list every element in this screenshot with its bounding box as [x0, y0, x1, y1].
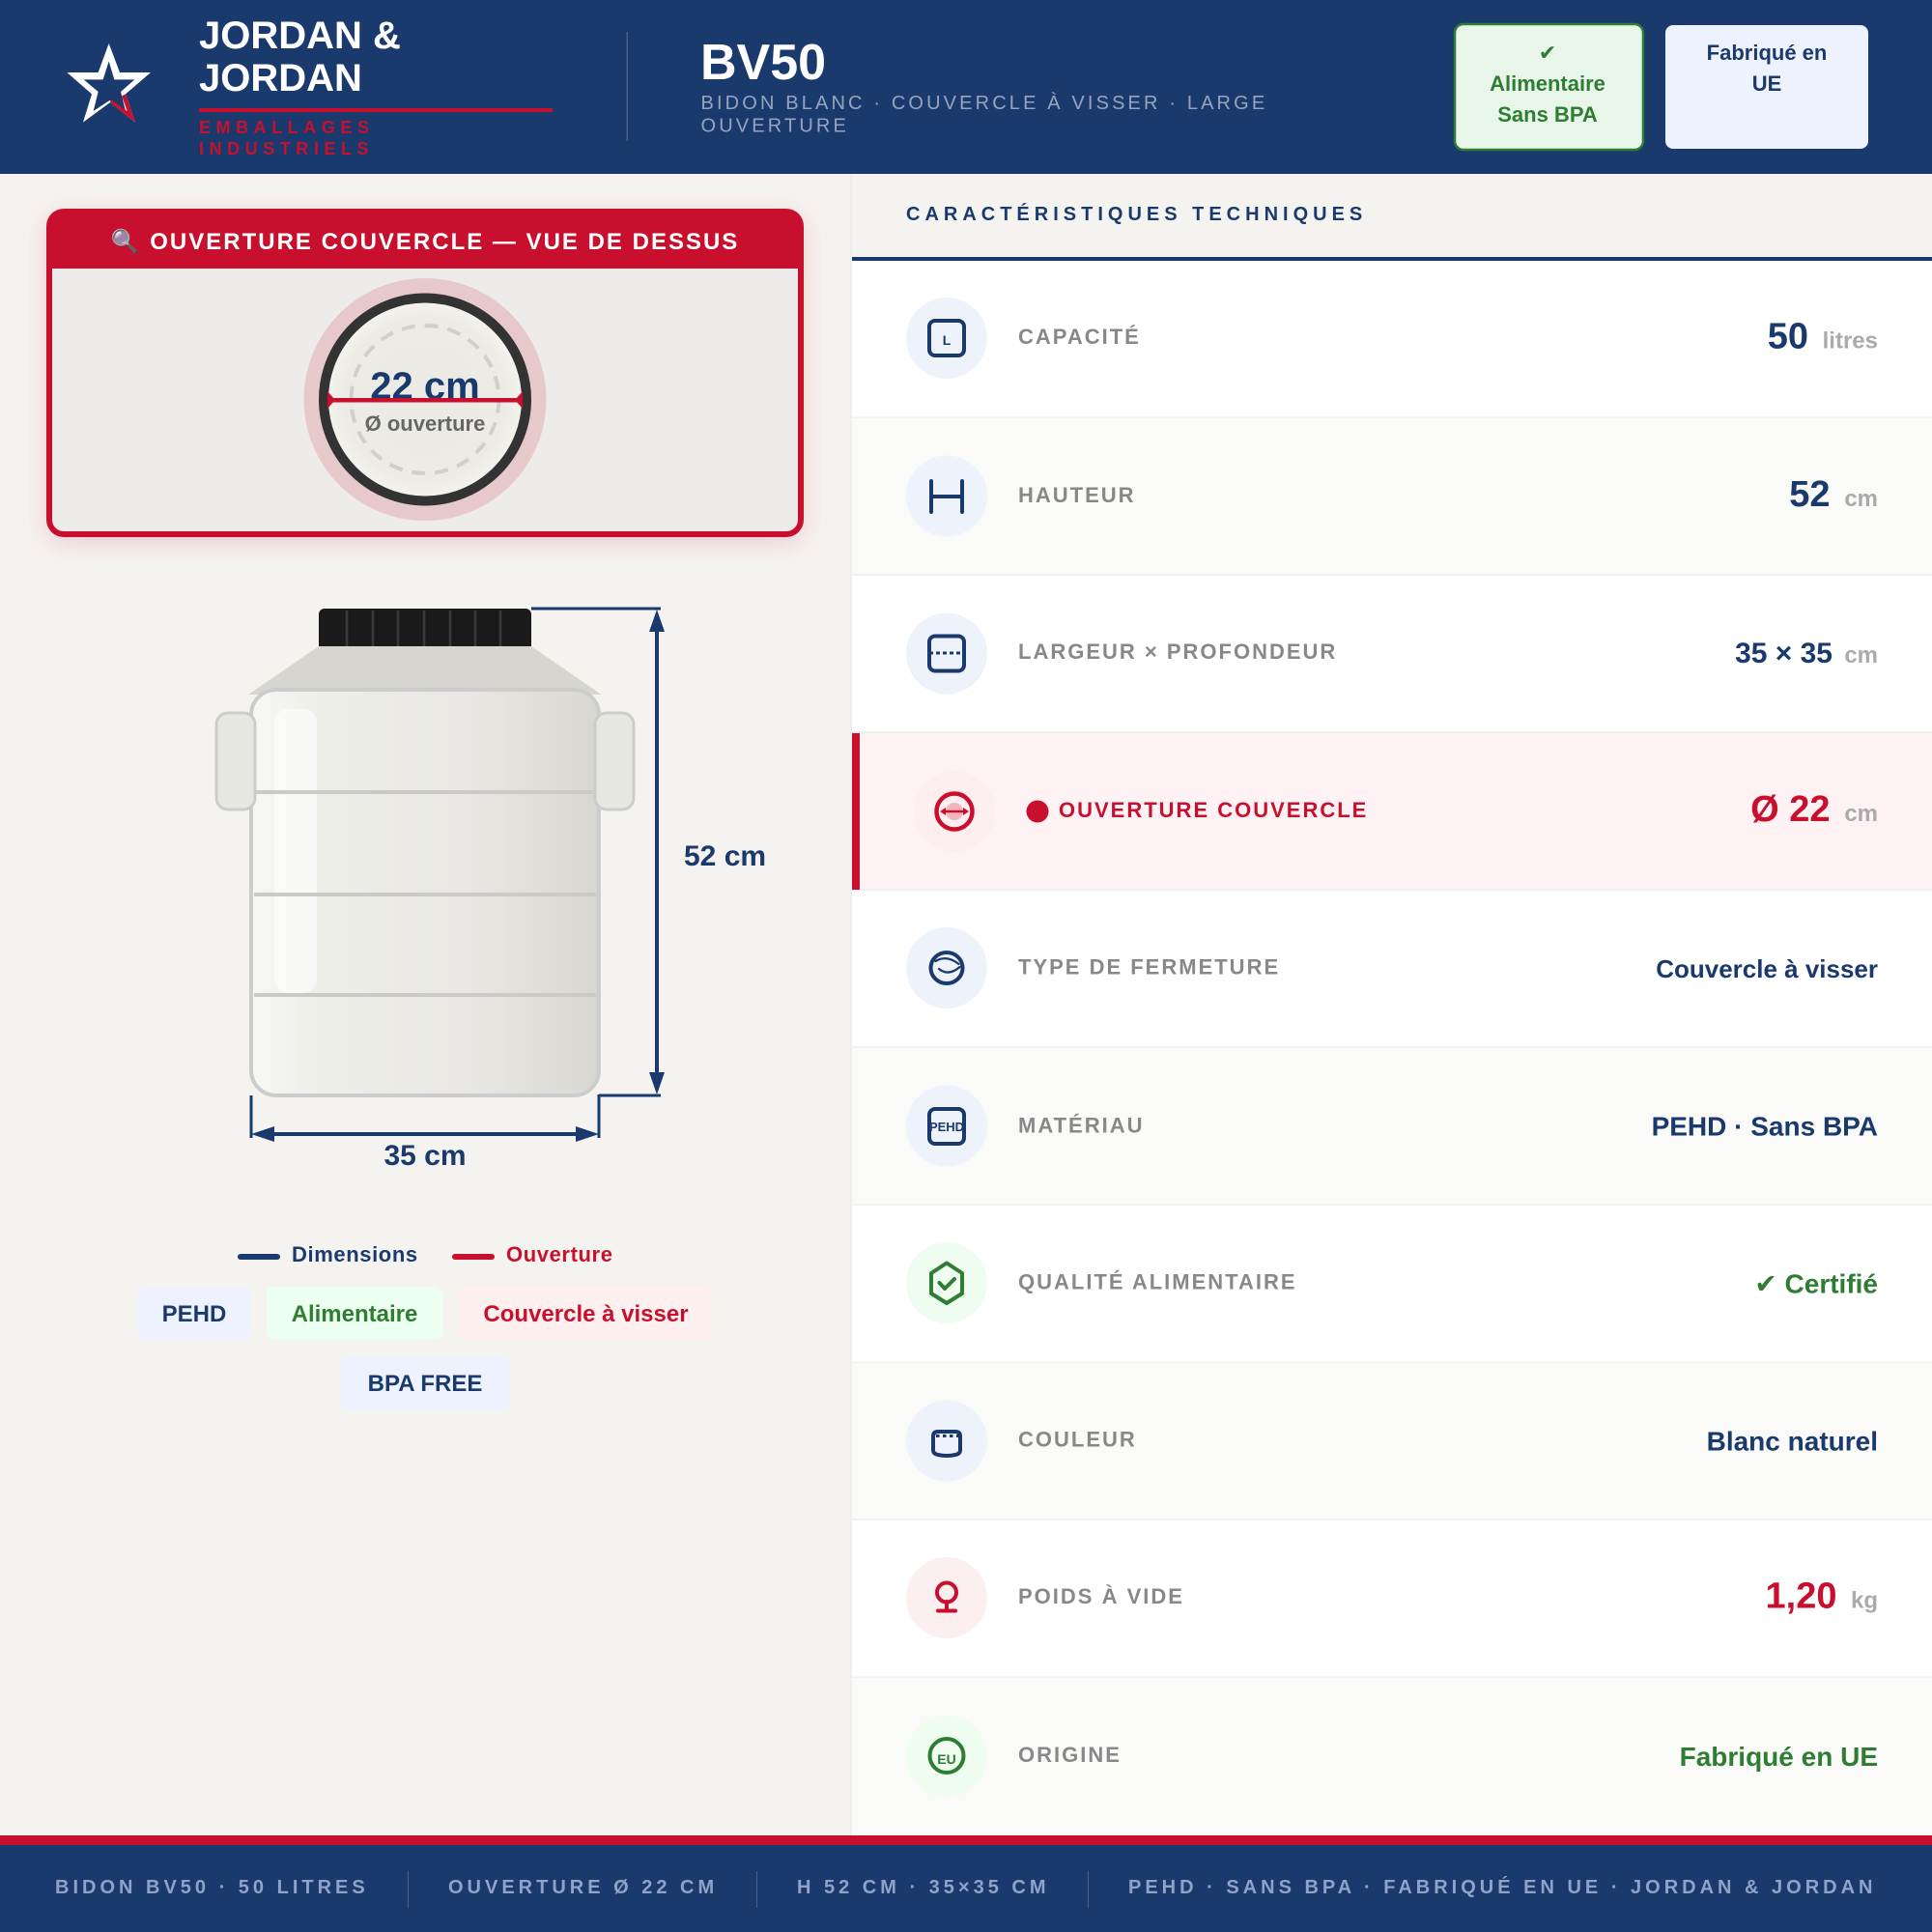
- badge: alimentaire: Alimentaire: [1490, 71, 1605, 96]
- icon: EU: [929, 1739, 964, 1773]
- badge: alimentaire: ✔: [1539, 41, 1556, 65]
- footer item: product: BIDON BV50 · 50 LITRES: [55, 1877, 369, 1898]
- badge: origine: UE: [1752, 71, 1781, 96]
- row: type de fermeture: TYPE DE FERMETURE: [1018, 954, 1280, 980]
- value: origine: Fabriqué en UE: [1680, 1742, 1878, 1772]
- row: hauteur: [852, 418, 1932, 576]
- value: couleur: Blanc naturel: [1707, 1426, 1878, 1457]
- arrow: height dimension: [531, 609, 665, 1095]
- legend: ouverture: Ouverture: [506, 1242, 613, 1266]
- bidon highlight: [274, 709, 317, 993]
- product subtitle: [701, 92, 1267, 137]
- panel: header: [0, 0, 1932, 174]
- footer item: material and brand: PEHD · SANS BPA · FABRIQUÉ EN UE · JORDAN & JORDAN: [1128, 1876, 1876, 1898]
- badge: origine: Fabriqué en: [1707, 41, 1827, 65]
- value: poids: [1766, 1577, 1878, 1617]
- value: largeur: 35 × 35: [1735, 638, 1833, 669]
- row: couleur: COULEUR: [1018, 1428, 1137, 1451]
- legend: dimensions: Dimensions: [292, 1242, 418, 1266]
- brand name: [199, 14, 401, 99]
- legend: [238, 1242, 613, 1266]
- icon: material: [929, 1109, 964, 1144]
- panel: opening callout: [46, 209, 804, 543]
- specs heading: [852, 174, 1932, 261]
- specs heading: CARACTÉRISTIQUES TECHNIQUES: [906, 203, 1367, 225]
- icon: colour drum: [933, 1432, 960, 1456]
- icon: EU: EU: [937, 1751, 956, 1767]
- row: capacité: CAPACITÉ: [1018, 325, 1141, 349]
- legend: ouverture: [452, 1242, 613, 1266]
- callout heading: 🔍 OUVERTURE COUVERCLE — VUE DE DESSUS: [111, 226, 739, 255]
- row: ouverture couvercle: [852, 733, 1932, 891]
- value: fermeture: Couvercle à visser: [1656, 954, 1878, 983]
- bidon shoulder: [248, 646, 601, 695]
- tag: Alimentaire: Alimentaire: [292, 1301, 417, 1327]
- product subtitle: OUVERTURE: [701, 116, 849, 137]
- drawing: bidon: [216, 609, 634, 1095]
- row: ouverture couvercle: OUVERTURE COUVERCLE: [1059, 798, 1368, 822]
- highlight dot: [1026, 800, 1049, 823]
- row: qualité alimentaire: QUALITÉ ALIMENTAIRE: [1018, 1269, 1297, 1294]
- brand tagline: EMBALLAGES: [199, 118, 375, 137]
- diameter line: [327, 391, 523, 409]
- brand tagline: [199, 118, 375, 158]
- value: matériau: PEHD · Sans BPA: [1652, 1111, 1878, 1142]
- width label: 35 cm: [384, 1140, 467, 1172]
- icon: material: PEHD: [929, 1120, 964, 1134]
- panel: technical specs: [850, 174, 1932, 1835]
- bidon cap: [319, 609, 531, 646]
- row: matériau: [852, 1048, 1932, 1206]
- value: hauteur: cm: [1844, 486, 1878, 512]
- icon: weight: [937, 1582, 956, 1611]
- row: qualité alimentaire: [852, 1206, 1932, 1364]
- value: capacité: [1768, 317, 1878, 357]
- footer item: opening: OUVERTURE Ø 22 CM: [448, 1877, 718, 1898]
- row: capacité: [852, 261, 1932, 419]
- badge: origine: [1665, 25, 1868, 149]
- right handle: [595, 713, 634, 810]
- icon: screw lid: [931, 952, 962, 983]
- tag: PEHD: [137, 1287, 251, 1340]
- icon: opening: [937, 794, 972, 829]
- icon: capacity: L: [943, 332, 952, 348]
- top view of lid opening: [303, 278, 547, 521]
- value: poids: 1,20: [1766, 1577, 1837, 1617]
- height label: 52 cm: [684, 840, 766, 872]
- icon: width: [929, 636, 964, 670]
- bidon body: [251, 690, 599, 1095]
- row: type de fermeture: [852, 891, 1932, 1048]
- icon: capacity: [929, 321, 964, 355]
- brand name: JORDAN: [199, 57, 362, 99]
- opening caption: Ø ouverture: [365, 412, 485, 436]
- value: capacité: 50: [1768, 317, 1808, 357]
- tag: Couvercle à visser: Couvercle à visser: [483, 1301, 689, 1327]
- value: ouverture: Ø 22: [1750, 789, 1830, 830]
- row: origine: [852, 1678, 1932, 1835]
- product subtitle: BIDON BLANC · COUVERCLE À VISSER · LARGE: [701, 92, 1267, 114]
- row: largeur: LARGEUR × PROFONDEUR: [1018, 639, 1337, 664]
- row: couleur: [852, 1363, 1932, 1520]
- value: ouverture: [1750, 789, 1878, 830]
- value: hauteur: [1789, 474, 1878, 515]
- row: largeur: [852, 576, 1932, 733]
- row: origine: ORIGINE: [1018, 1743, 1122, 1767]
- brand tagline: INDUSTRIELS: [199, 139, 374, 158]
- product code: BV50: [700, 35, 826, 91]
- tag: Couvercle à visser: [459, 1287, 712, 1340]
- value: qualité: ✔ Certifié: [1754, 1269, 1878, 1298]
- panel: footer: [0, 1835, 1932, 1932]
- badge: alimentaire: Sans BPA: [1497, 102, 1598, 127]
- value: hauteur: 52: [1789, 474, 1830, 515]
- tag: Alimentaire: [267, 1287, 442, 1340]
- opening value: 22 cm: [370, 365, 480, 408]
- tags: [137, 1287, 712, 1410]
- footer item: dimensions: H 52 CM · 35×35 CM: [797, 1877, 1050, 1898]
- row: hauteur: HAUTEUR: [1018, 483, 1136, 507]
- brand name: JORDAN &: [199, 14, 401, 57]
- tag: BPA FREE: [341, 1356, 509, 1410]
- value: poids: kg: [1851, 1588, 1878, 1613]
- badge: alimentaire: [1455, 24, 1643, 150]
- value: capacité: litres: [1823, 328, 1878, 354]
- value: largeur: cm: [1844, 642, 1878, 668]
- arrow: width dimension: [251, 1094, 599, 1142]
- row: poids à vide: [852, 1520, 1932, 1679]
- row: poids à vide: POIDS À VIDE: [1018, 1584, 1184, 1608]
- left handle: [216, 713, 255, 810]
- icon: height: [931, 481, 962, 512]
- icon: star logo: [67, 43, 151, 123]
- tag: PEHD: PEHD: [162, 1301, 226, 1327]
- value: largeur: [1735, 638, 1878, 669]
- row: matériau: MATÉRIAU: [1018, 1113, 1144, 1138]
- brand rule: [199, 108, 553, 112]
- value: ouverture: cm: [1844, 801, 1878, 827]
- tag: BPA FREE: BPA FREE: [368, 1371, 482, 1397]
- icon: shield check: [931, 1264, 962, 1303]
